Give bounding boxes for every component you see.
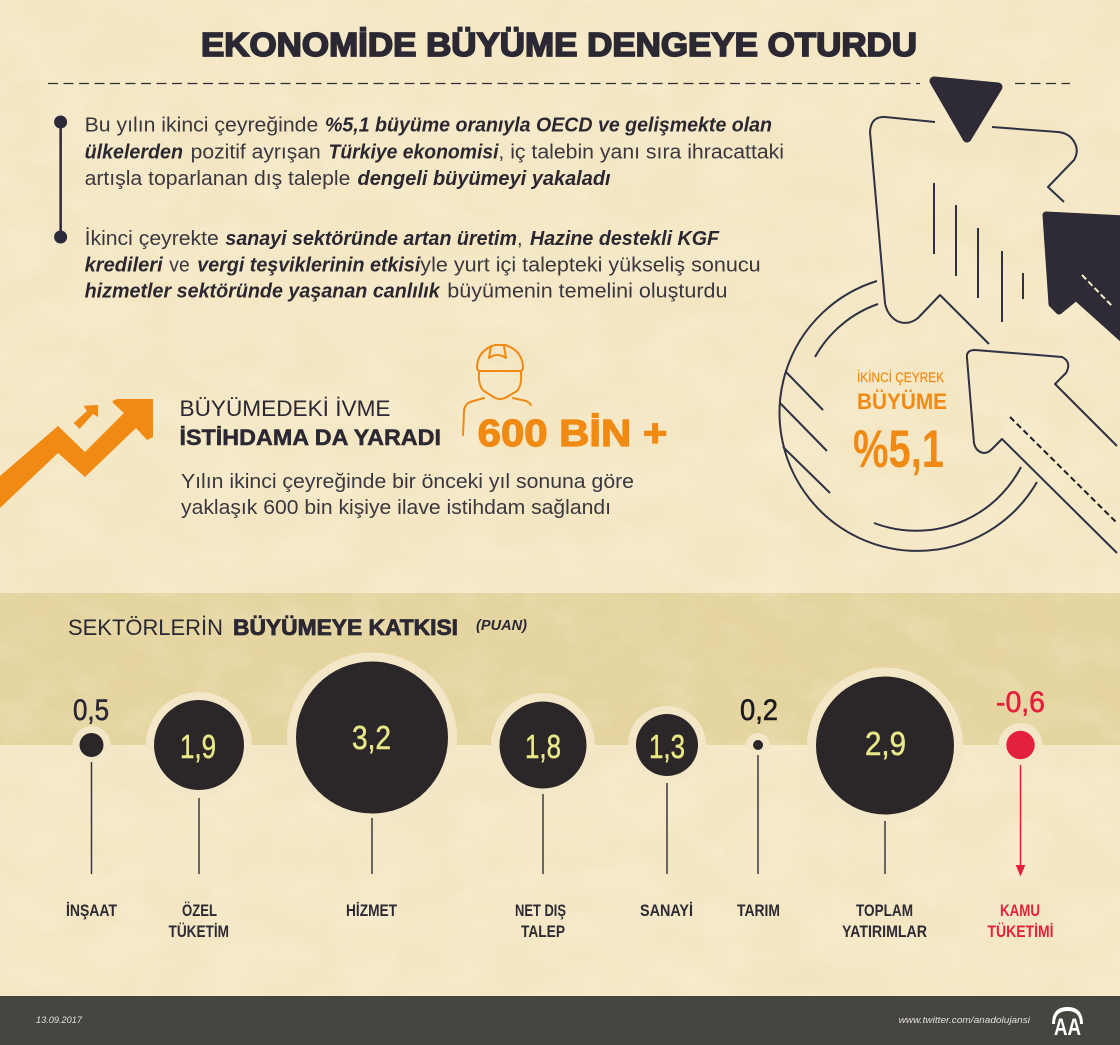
heading: employment: BÜYÜMEDEKİ İVME	[180, 396, 390, 421]
icon: agency logo	[1052, 1007, 1083, 1041]
text block: first paragraph: %5,1 büyüme oranıyla OECD ve gelişmekte olan	[325, 115, 772, 137]
callout: second quarter growth: İKİNCİ ÇEYREK	[857, 370, 944, 385]
icon: orange growth arrow	[0, 399, 153, 508]
black dashed line	[1010, 417, 1118, 524]
heading: sector contribution	[68, 615, 527, 640]
title: EKONOMİDE BÜYÜME DENGEYE OTURDU	[201, 26, 917, 63]
text block: first paragraph: pozitif ayrışan	[191, 142, 321, 164]
bubble: inşaat 0,5: 0,5	[73, 694, 109, 727]
heading: sector contribution: SEKTÖRLERİN	[68, 615, 223, 640]
bubble: net dış talep 1,8: 1,8	[525, 728, 561, 765]
bubble: özel tüketim 1,9: ÖZEL	[182, 901, 217, 920]
text block: second paragraph: ,	[517, 228, 523, 250]
bubble: toplam yatırımlar 2,9: YATIRIMLAR	[842, 922, 927, 941]
stat: 600 thousand plus: 600 BİN +	[478, 413, 667, 455]
text block: second paragraph: İkinci çeyrekte	[85, 227, 219, 250]
text block: employment description	[181, 471, 634, 519]
bubble: net dış talep 1,8: NET DIŞ	[515, 901, 566, 920]
bubble: özel tüketim 1,9	[146, 692, 252, 941]
icon: agency logo: AA	[1054, 1014, 1081, 1041]
speed lines	[934, 183, 1023, 322]
text block: first paragraph: Türkiye ekonomisi	[328, 142, 499, 164]
footer link: www.twitter.com/anadolujansi	[899, 1015, 1031, 1026]
text block: first paragraph: artışla toparlanan dış taleple	[85, 168, 350, 190]
bubble: tarım 0,2: 0,2	[740, 694, 778, 727]
callout: second quarter growth: BÜYÜME	[857, 389, 947, 414]
text block: second paragraph: sanayi sektöründe artan üretim	[225, 228, 517, 250]
bubble: tarım 0,2	[737, 694, 780, 920]
text block: first paragraph: dengeli büyümeyi yakaladı	[358, 168, 611, 190]
sector band background	[0, 593, 1120, 745]
bubble: kamu tüketimi -0,6: KAMU	[1000, 901, 1040, 920]
text block: second paragraph: ve	[169, 254, 190, 276]
text block: second paragraph: yle yurt içi talepteki yükseliş sonucu	[420, 254, 761, 276]
icon: dark triangle arrowhead	[934, 81, 998, 138]
text block: first paragraph: ülkelerden	[85, 142, 183, 164]
text block: first paragraph: , iç talebin yanı sıra ihracattaki	[498, 142, 784, 164]
bubble: kamu tüketimi -0,6: TÜKETİMİ	[988, 922, 1054, 941]
bubble: özel tüketim 1,9: 1,9	[180, 728, 216, 765]
footer date: 13.09.2017	[36, 1015, 83, 1026]
icon: small outlined arrow	[967, 350, 1117, 553]
title divider	[48, 82, 1070, 84]
bubble: hizmet 3,2: 3,2	[352, 719, 391, 756]
icon: growth arrows and circle illustration	[780, 81, 1120, 553]
icon: large outlined arrow	[870, 117, 1077, 344]
bubble: inşaat 0,5	[66, 694, 118, 920]
text block: second paragraph: büyümenin temelini oluşturdu	[447, 280, 728, 302]
callout: second quarter growth: %5,1	[853, 420, 944, 479]
circle arcs and hatching	[780, 281, 1037, 551]
text block: second paragraph: hizmetler sektöründe yaşanan canlılık	[85, 280, 441, 302]
callout: second quarter growth	[853, 370, 947, 479]
bubble: kamu tüketimi -0,6	[988, 686, 1054, 941]
bubble: toplam yatırımlar 2,9: TOPLAM	[856, 901, 913, 920]
text block: second paragraph: vergi teşviklerinin etkisi	[197, 254, 421, 276]
text block: first paragraph	[85, 115, 784, 190]
icon: construction worker	[463, 345, 531, 435]
bubble: sanayi 1,3: 1,3	[649, 728, 685, 765]
bubble: sanayi 1,3	[628, 706, 706, 920]
bubble: inşaat 0,5: İNŞAAT	[66, 901, 118, 920]
bubble: net dış talep 1,8: TALEP	[521, 922, 565, 941]
bubble: tarım 0,2: TARIM	[737, 901, 780, 920]
icon: dark filled arrow	[1046, 215, 1120, 341]
bubble: hizmet 3,2	[287, 652, 457, 920]
text block: employment description: Yılın ikinci çeyreğinde bir önceki yıl sonuna göre	[181, 471, 634, 493]
white dashes on dark arrow	[1082, 275, 1113, 307]
text block: first paragraph: Bu yılın ikinci çeyreğinde	[85, 115, 318, 137]
bubble: toplam yatırımlar 2,9	[807, 668, 963, 941]
bubble: toplam yatırımlar 2,9: 2,9	[865, 725, 906, 762]
heading: sector contribution: (PUAN)	[476, 617, 527, 634]
bubble: kamu tüketimi -0,6: -0,6	[996, 686, 1045, 719]
heading: employment	[180, 396, 441, 450]
bubble: hizmet 3,2: HİZMET	[346, 901, 397, 920]
footer	[0, 996, 1120, 1045]
bubble: özel tüketim 1,9: TÜKETİM	[168, 922, 229, 941]
text block: employment description: yaklaşık 600 bin kişiye ilave istihdam sağlandı	[181, 497, 611, 519]
text block: second paragraph: Hazine destekli KGF	[530, 228, 720, 250]
bubble: net dış talep 1,8	[491, 693, 595, 941]
text block: second paragraph	[85, 227, 761, 302]
heading: sector contribution: BÜYÜMEYE KATKISI	[233, 615, 458, 640]
text block: second paragraph: kredileri	[85, 254, 163, 276]
bullet timeline	[54, 116, 67, 244]
bubble: sanayi 1,3: SANAYİ	[640, 901, 693, 920]
heading: employment: İSTİHDAMA DA YARADI	[180, 425, 441, 450]
